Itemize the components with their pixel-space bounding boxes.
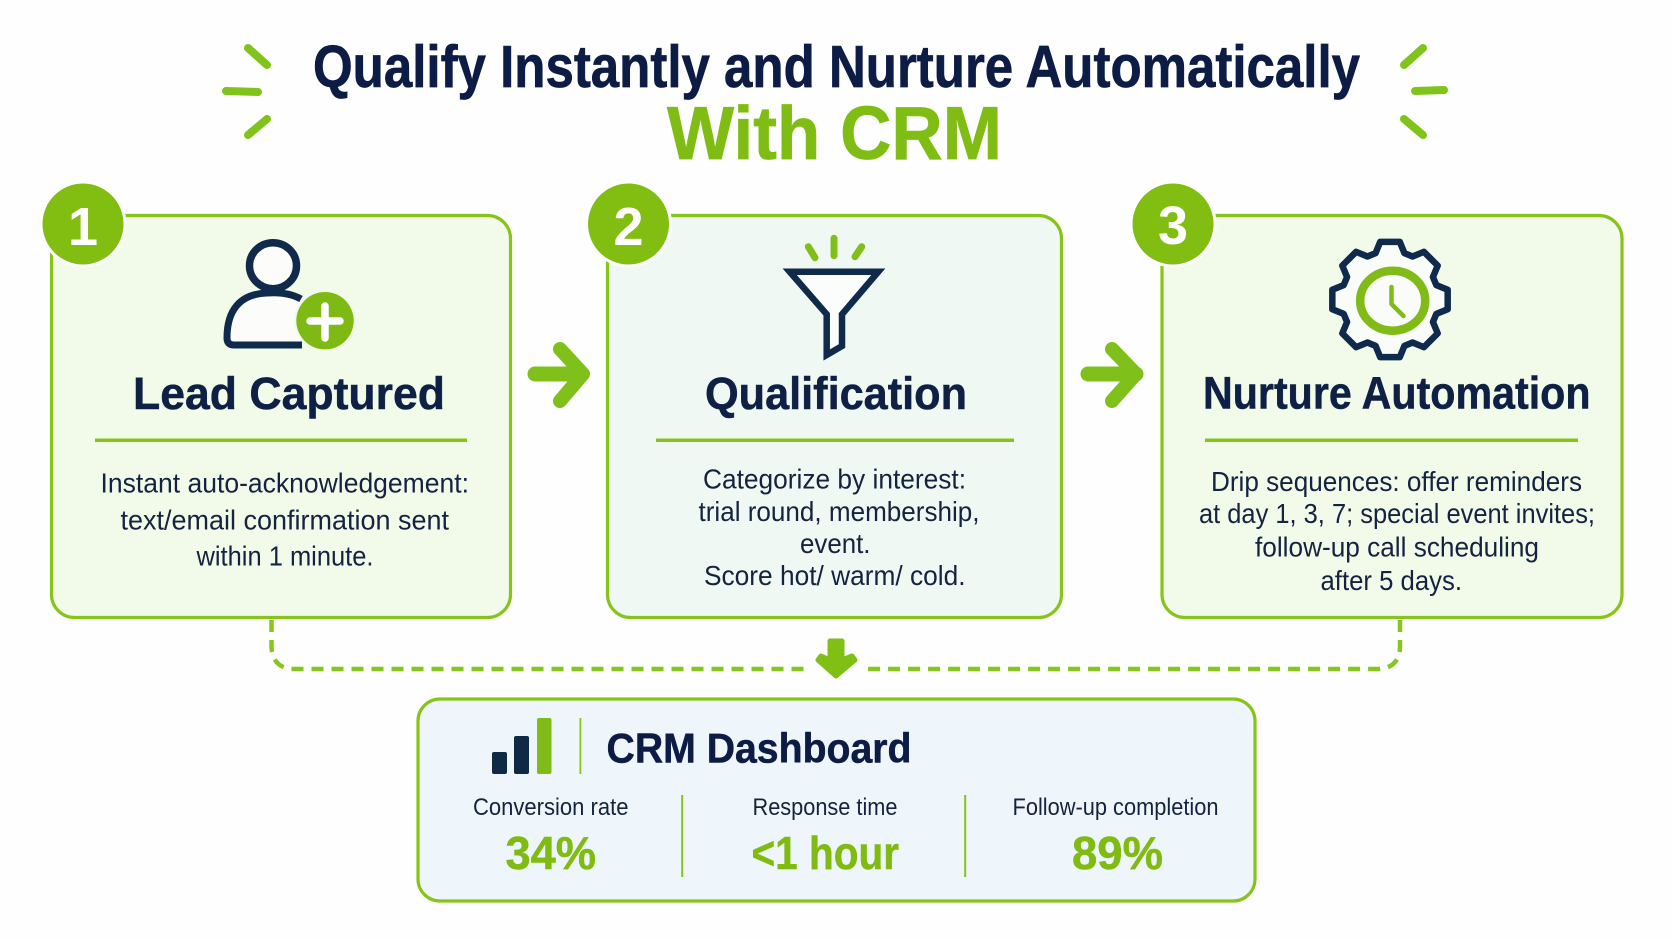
metric: conversion rate (473, 794, 628, 879)
text: qualification description: Categorize by interest: (703, 464, 966, 494)
title: Qualify Instantly and Nurture Automatically (313, 34, 1360, 100)
heading: nurture automation: Nurture Automation (1203, 368, 1590, 418)
chart icon: bars (492, 718, 552, 774)
badge: step 3: 3 (1158, 196, 1188, 256)
panel: nurture automation (1130, 180, 1622, 618)
metric: follow-up completion: Follow-up completion (1012, 794, 1218, 821)
icon: user with plus (227, 243, 356, 352)
heading: lead captured: Lead Captured (133, 368, 445, 419)
icon: left sparks (226, 48, 267, 135)
text: qualification description: trial round, membership, (698, 496, 980, 527)
connector: dashed lines to dashboard (272, 620, 1400, 669)
arrow: step 2 to 3 (1088, 349, 1136, 401)
panel: qualification (585, 180, 1062, 618)
title (313, 34, 1360, 175)
text: qualification description: event. (800, 528, 870, 559)
text: nurture automation description: after 5 days. (1320, 565, 1462, 596)
icon: gear with clock (1332, 242, 1448, 357)
heading: crm dashboard: CRM Dashboard (606, 724, 912, 772)
badge: step 1: 1 (68, 197, 98, 257)
text: lead captured description: Instant auto-acknowledgement: (100, 468, 469, 498)
metric: follow-up completion: 89% (1072, 827, 1163, 879)
metric: response time: Response time (752, 794, 898, 821)
panel: lead captured (40, 180, 510, 618)
metric: follow-up completion (1012, 794, 1218, 879)
text: qualification description: Score hot/ warm/ cold. (704, 560, 966, 591)
icon: funnel (790, 238, 878, 355)
arrow: down to dashboard (818, 641, 855, 676)
badge: step 2 (585, 180, 672, 268)
metric: conversion rate: Conversion rate (473, 794, 628, 821)
text: nurture automation description (1199, 466, 1595, 596)
title: With CRM (667, 91, 1002, 175)
text: lead captured description: text/email confirmation sent (120, 504, 449, 536)
metric: response time (752, 794, 899, 879)
text: nurture automation description: follow-up call scheduling (1255, 532, 1539, 562)
heading: qualification: Qualification (705, 368, 967, 419)
text: nurture automation description: at day 1, 3, 7; special event invites; (1199, 498, 1595, 529)
icon: right sparks (1404, 48, 1444, 135)
badge: step 3 (1130, 180, 1216, 268)
text: lead captured description: within 1 minute. (196, 540, 374, 572)
badge: step 1 (40, 180, 126, 268)
text: lead captured description (100, 468, 469, 572)
panel: crm dashboard (418, 699, 1255, 901)
text: qualification description (698, 464, 980, 591)
metric: response time: <1 hour (752, 827, 899, 879)
metric: conversion rate: 34% (506, 827, 596, 879)
arrow: step 1 to 2 (535, 349, 583, 401)
badge: step 2: 2 (613, 197, 644, 257)
text: nurture automation description: Drip sequences: offer reminders (1211, 466, 1582, 497)
